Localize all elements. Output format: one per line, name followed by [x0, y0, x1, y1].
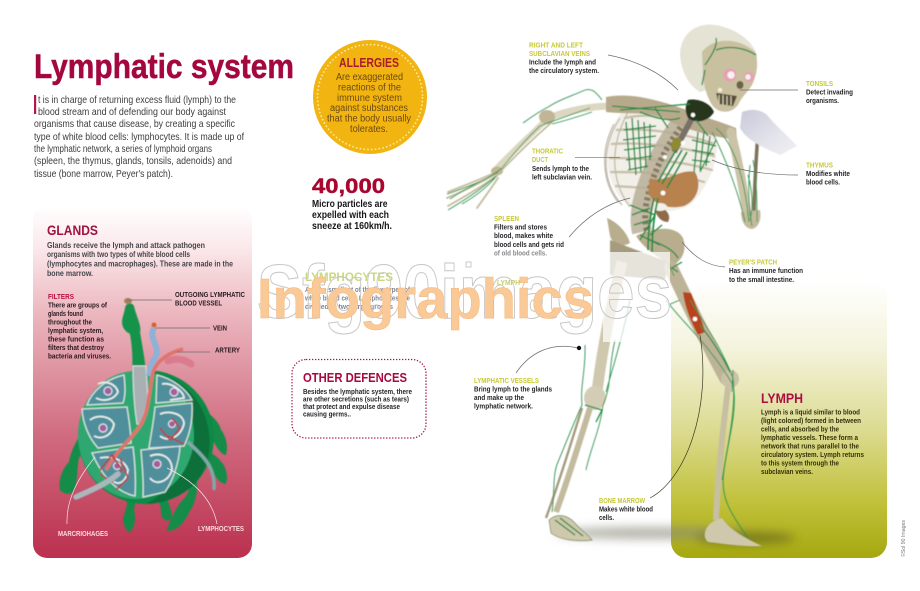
red capillaries [100, 418, 184, 490]
filters note: throughout the [48, 318, 92, 326]
other defences text [303, 387, 412, 419]
lymphocytes text [304, 285, 410, 311]
panel text: lymph [761, 390, 864, 476]
outer rib lines [605, 112, 630, 207]
panel: glands [33, 206, 252, 558]
lymph text: circulatory system. Lymph returns [761, 450, 864, 459]
leader [712, 160, 798, 175]
leader [516, 346, 578, 373]
intro lines: (spleen, the thymus, glands, tonsils, adenoids) and [34, 156, 232, 167]
stat text: expelled with each [312, 210, 389, 221]
callout: peyer's patch [682, 242, 803, 284]
spine band [640, 122, 682, 232]
panel: lymph background [671, 280, 887, 558]
other defences text: causing germs.. [303, 410, 351, 419]
outlet tube [76, 474, 118, 497]
leader [650, 335, 703, 498]
lymph text [761, 408, 864, 476]
skull vessels [702, 38, 756, 85]
viewer-left arm bones [447, 106, 612, 208]
allergies text: tolerates. [350, 124, 388, 135]
other defences text: that protect and expulse disease [303, 402, 400, 411]
ribs [610, 116, 714, 194]
allergies text: reactions of the [338, 82, 401, 94]
callout: thoracic duct: Sends lymph to the [532, 164, 589, 173]
white cell network [90, 382, 184, 483]
callout: lymphatic vessels: lymphatic network. [474, 402, 533, 410]
callout: thoracic duct [532, 146, 620, 182]
gland labels: BLOOD VESSEL [175, 299, 223, 308]
sternum band [674, 118, 692, 152]
callout: spleen: of old blood cells. [494, 248, 547, 258]
leader [740, 89, 798, 91]
callout: tonsils: organisms. [806, 96, 839, 105]
leader [608, 55, 678, 90]
copyright: ©Sol 90 Images [900, 520, 907, 557]
intro text block [34, 95, 244, 180]
filters note: There are groups of [48, 300, 108, 310]
callout: subclavian veins: Include the lymph and [529, 58, 596, 66]
callout: tonsils [740, 79, 853, 105]
white node dots [661, 88, 722, 321]
lower mesh [630, 205, 678, 258]
callout: subclavian veins: the circulatory system. [529, 66, 599, 75]
label: LYMPHATIC VESSELS [474, 376, 539, 385]
nuclei [99, 387, 178, 470]
stat text [312, 199, 392, 232]
skull [680, 25, 757, 112]
lymph text: lymphatic vessels. These form a [761, 433, 859, 442]
vein [149, 328, 157, 376]
glands text [47, 241, 233, 278]
filters note: glands found [48, 309, 83, 318]
gland labels: OUTGOING LYMPHATIC [175, 290, 245, 299]
left leg vessels [552, 300, 630, 536]
central bundle [648, 150, 687, 252]
stomach organ [648, 171, 698, 207]
callout: bone marrow: cells. [599, 513, 614, 522]
eyes [724, 68, 736, 82]
leader [682, 242, 725, 267]
lymph text: (light colored) formed in between [761, 416, 861, 425]
right leg vessels [666, 262, 748, 538]
callout: spleen [494, 198, 630, 258]
filters note: lymphatic system, [48, 326, 103, 335]
lymph text: to this system through the [761, 458, 839, 468]
callout: thoracic duct: left subclavian vein. [532, 172, 592, 182]
floor shadow [555, 527, 795, 544]
stat text: sneeze at 160km/h. [312, 221, 392, 232]
label: BONE MARROW [599, 496, 646, 505]
drop cap bar [34, 95, 36, 114]
allergies heading: ALLERGIES [339, 55, 399, 70]
compartments [82, 375, 192, 497]
filters note: bacteria and viruses. [48, 352, 111, 360]
label: TONSILS [806, 79, 833, 88]
callout: peyer's patch: Has an immune function [729, 266, 803, 275]
left mesh [612, 104, 690, 175]
watermark haze box [603, 252, 670, 342]
other defences text: Besides the lymphatic system, there [303, 387, 412, 396]
filters note: these function as [48, 334, 104, 344]
shoulders and clavicle [606, 95, 737, 140]
lymph text: network that runs parallel to the [761, 442, 859, 450]
label: THORATIC [532, 146, 563, 156]
glands text: (lymphocytes and macrophages). These are made in the [47, 260, 233, 268]
leader lines [127, 300, 210, 352]
faint small label: LYMPH [497, 280, 520, 287]
gland illustration [60, 298, 226, 531]
other defences heading: OTHER DEFENCES [303, 370, 407, 385]
callout: spleen: blood cells and gets rid [494, 240, 564, 249]
glands background [33, 206, 252, 558]
number: 40,000 [312, 175, 385, 198]
white leader lines [67, 457, 217, 524]
central sinus tube [133, 366, 148, 424]
right arm bones and cloth [731, 110, 797, 229]
intro lines [34, 95, 244, 180]
lymph text: Lymph is a liquid similar to blood [761, 408, 860, 416]
callout: subclavian veins: SUBCLAVIAN VEINS [529, 49, 590, 58]
left lower leg [546, 386, 606, 541]
watermark: infographics: Infographics [257, 267, 594, 331]
gland labels: LYMPHOCYTES [198, 524, 244, 533]
statistic: 40,000 [312, 175, 392, 232]
right arm vessels [712, 128, 757, 226]
title: Lymphatic system [34, 48, 294, 86]
other defences text: are other secretions (such as tears) [303, 395, 409, 404]
callout: lymphatic vessels: Bring lymph to the glands [474, 384, 552, 394]
dotted frame [292, 360, 426, 438]
elbow and wrist joints [491, 110, 555, 176]
lymphocytes text: divided in two large groups [305, 302, 393, 311]
dot [577, 346, 581, 350]
callout: thymus: Modifies white [806, 169, 850, 178]
allergies text [327, 72, 411, 135]
panel: other defences [292, 360, 426, 438]
viewer-left arm vessels [447, 89, 602, 210]
glands text: organisms with two types of white blood cells [47, 250, 190, 259]
intro lines: the lymphatic network, a series of lymphoid organs [34, 144, 212, 155]
gland labels [58, 290, 245, 538]
intro lines: blood stream and of defending our body against [38, 107, 226, 118]
pelvis [607, 218, 685, 280]
callout: peyer's patch: to the small intestine. [729, 275, 794, 284]
right thigh muscle [683, 292, 705, 335]
leader [575, 157, 620, 159]
trunk vessel mesh [612, 104, 716, 258]
glands text: bone marrow. [47, 269, 93, 278]
callout: lymphatic vessels: and make up the [474, 393, 524, 402]
label: THYMUS [806, 160, 833, 170]
gland labels: VEIN [213, 324, 227, 332]
callout: bone marrow [599, 335, 703, 522]
label: SPLEEN [494, 214, 519, 223]
callout: allergies [313, 40, 427, 154]
nose and teeth [736, 81, 744, 89]
afferent tube with node [122, 303, 146, 372]
filters note: filters that destroy [48, 343, 104, 352]
illustration: skeleton with lymphatic network [447, 25, 797, 546]
allergies text: immune system [337, 93, 402, 104]
callout: thymus [712, 160, 850, 186]
left femur [597, 262, 622, 392]
lymphocytes text: white blood cells. Lymphocytes are [304, 294, 410, 302]
intro lines: t is in charge of returning excess fluid (lymph) to the [38, 95, 236, 106]
faint lymphocytes block [304, 272, 410, 311]
artery [106, 349, 183, 470]
face [702, 41, 757, 112]
callout: subclavian veins [529, 40, 678, 90]
callout: tonsils: Detect invading [806, 88, 853, 96]
leader [569, 198, 630, 237]
right mesh [692, 120, 716, 172]
gall node [669, 136, 683, 152]
callout: lymphatic vessels [474, 346, 581, 410]
callout: bone marrow: Makes white blood [599, 504, 653, 514]
efferent limbs [60, 412, 226, 531]
neck node cluster [686, 100, 714, 121]
watermark small square [466, 262, 471, 267]
label: RIGHT AND LEFT [529, 40, 583, 50]
filters note [48, 292, 111, 360]
lymphocytes heading: LYMPHOCYTES [305, 272, 393, 284]
label: PEYER'S PATCH [729, 258, 777, 266]
intro lines: organisms that cause disease, by creating a specific [34, 119, 235, 130]
gland labels: MARCRIOHAGES [58, 529, 108, 538]
stat text: Micro particles are [312, 199, 388, 210]
lymph text: subclavian veins. [761, 467, 813, 476]
callout: thoracic duct: DUCT [532, 155, 548, 164]
lymphocytes text: Are the smallest of the five types of [305, 285, 410, 294]
gland labels: ARTERY [215, 346, 240, 354]
right leg bones [705, 370, 762, 546]
lymph heading: LYMPH [761, 390, 803, 406]
allergies text: Are exaggerated [336, 72, 403, 83]
watermark: outlined: Sfg90images [257, 250, 672, 335]
filters note: FILTERS [48, 292, 74, 301]
callout: thymus: blood cells. [806, 178, 840, 186]
glands heading: GLANDS [47, 222, 98, 238]
callout: spleen: Filters and stores [494, 222, 547, 232]
allergies text: against substances [330, 103, 408, 114]
node body [78, 370, 214, 504]
callout: spleen: blood, makes white [494, 231, 553, 240]
rib cage [607, 106, 717, 211]
allergies text: that the body usually [327, 114, 411, 124]
glands text: Glands receive the lymph and attack pathogen [47, 241, 205, 250]
spine vertebrae [645, 118, 688, 242]
right thigh [671, 268, 726, 378]
cranium [680, 25, 757, 92]
intro lines: type of white blood cells: lymphocytes. It is made up of [34, 132, 244, 143]
lymph text: cells, and absorbed by the [761, 425, 839, 434]
intro lines: tissue (bone marrow, Peyer's patch). [34, 169, 173, 180]
allergies disc [313, 40, 427, 154]
